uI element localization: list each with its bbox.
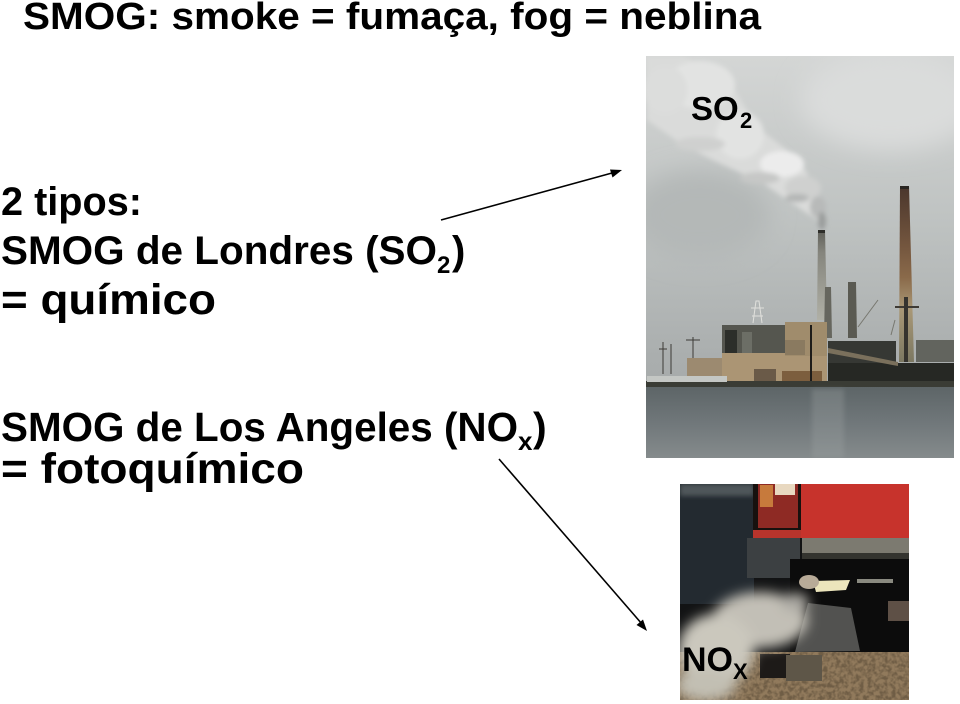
shoreline [646, 381, 954, 387]
truck body [801, 484, 909, 538]
text block: 2 tipos: 2 tipos: [1, 180, 142, 224]
chimneys [817, 186, 919, 362]
text block: SMOG de Londres: 2 [437, 252, 450, 279]
mud flap [795, 603, 860, 652]
smoke plume [643, 56, 826, 230]
exhaust pipe [813, 580, 850, 592]
plant buildings [687, 322, 954, 381]
label: NOx: NO [682, 641, 733, 679]
text block: SMOG de Londres: SMOG de Londres (SO [1, 229, 437, 273]
photo: power plant with smoke [630, 50, 960, 458]
text block: SMOG de Londres [1, 229, 465, 324]
text block: SMOG de Los Angeles: ) [533, 404, 547, 450]
pylons and wires [659, 300, 895, 374]
arrow: Los Angeles to exhaust [499, 459, 647, 631]
label: NOx [684, 647, 748, 679]
bumper [802, 538, 909, 554]
arrow: Londres to power plant [441, 170, 622, 220]
text block: SMOG de Londres: = químico [1, 276, 216, 324]
photo: car exhaust [676, 484, 909, 701]
text block: SMOG de Los Angeles: x [518, 426, 533, 456]
label: SO2: 2 [740, 108, 752, 133]
text block: SMOG de Los Angeles [1, 404, 547, 493]
water [646, 387, 954, 458]
text block: SMOG de Londres: ) [452, 229, 465, 273]
text block: SMOG de Los Angeles: SMOG de Los Angeles (NO [1, 404, 518, 450]
ground leaves [680, 652, 909, 700]
label: NOx: X [733, 659, 748, 684]
label: SO2 [692, 96, 752, 128]
text block: SMOG de Los Angeles: = fotoquímico [1, 445, 304, 493]
exhaust smoke [676, 592, 809, 701]
label: SO2: SO [691, 90, 739, 127]
